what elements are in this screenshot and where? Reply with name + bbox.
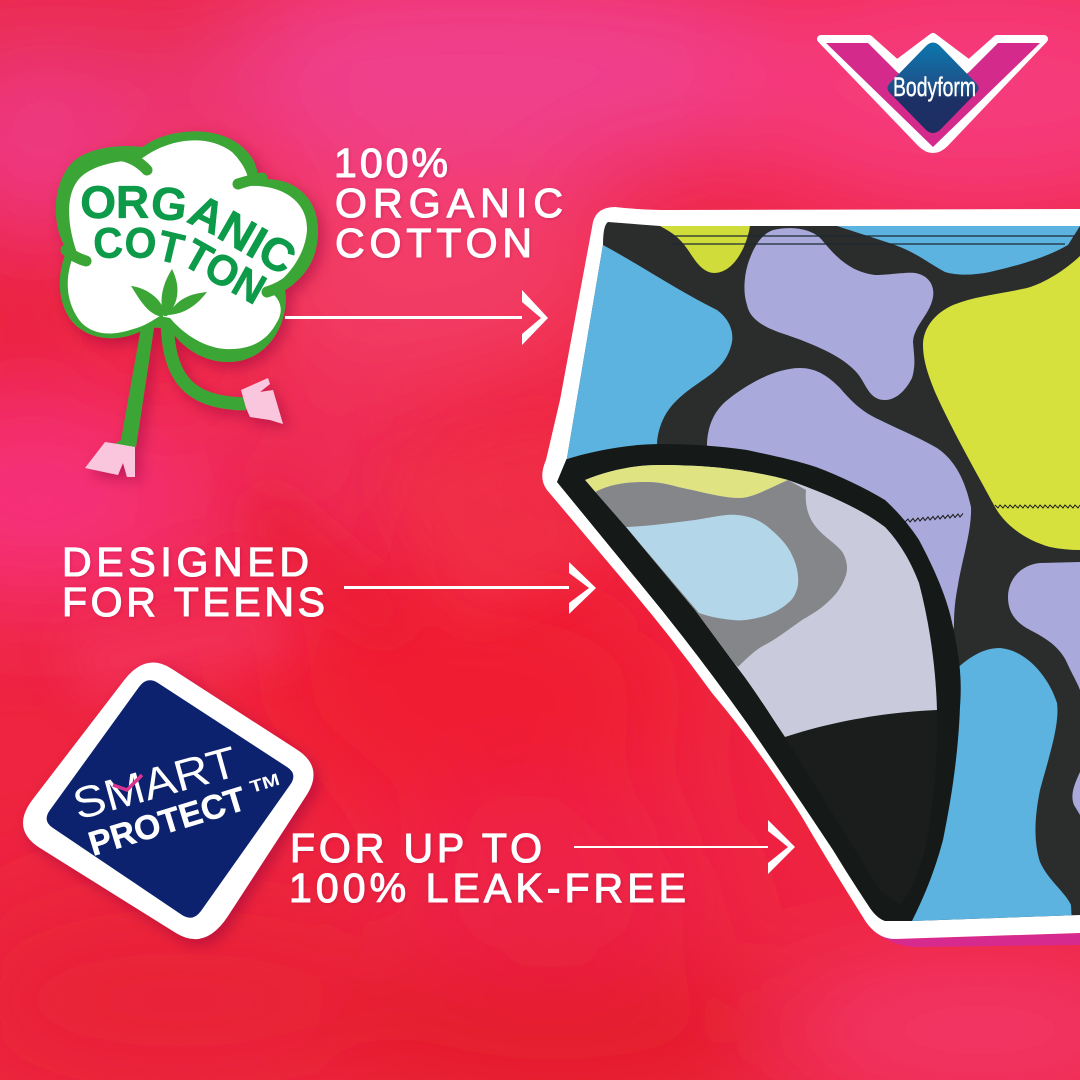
logo magenta chevron <box>826 43 1040 147</box>
stem right <box>167 318 246 404</box>
lining yellow patch <box>586 465 788 498</box>
blob: lilac right <box>1008 562 1080 690</box>
badge word: protect: PROTECT <box>84 780 250 864</box>
shoe left <box>85 442 135 477</box>
heading: 100% organic cotton: COTTON <box>335 220 532 266</box>
blob: blue left <box>560 245 732 480</box>
heading: 100% organic cotton <box>334 140 563 266</box>
heading: for up to 100% leak-free: FOR UP TO <box>290 825 542 871</box>
logo wordmark: Bodyform <box>893 72 976 102</box>
gusset black trim <box>557 444 961 921</box>
heading: for up to 100% leak-free: 100% LEAK-FREE <box>289 865 686 911</box>
panel: underwear photo with white outline <box>540 200 1080 940</box>
cotton green outline <box>56 131 318 362</box>
blob: blue bottom <box>905 648 1072 925</box>
cotton lobe tabs <box>66 155 290 292</box>
arrow: to absorbent gusset <box>574 820 795 874</box>
logo: Bodyform <box>821 37 1044 149</box>
zigzag stitching <box>905 505 1080 522</box>
gusset black mesh panel <box>785 710 937 737</box>
heading: 100% organic cotton: 100% <box>334 140 448 186</box>
blob: blue top <box>837 226 1080 275</box>
heading: designed for teens: DESIGNED <box>62 539 309 585</box>
lining blue patch <box>626 515 798 620</box>
fabric print <box>540 200 1080 940</box>
heading: for up to 100% leak-free <box>289 825 686 911</box>
badge text: cotton: COTTON <box>94 227 268 304</box>
icon: smart protect badge <box>23 663 314 939</box>
lining grey band <box>595 480 847 667</box>
blob: yellow right <box>923 256 1080 550</box>
blob: lilac middle <box>744 228 933 400</box>
blob: yellow top <box>660 226 750 273</box>
icon: organic cotton badge <box>54 131 329 486</box>
badge word: smart: SMART <box>68 738 243 830</box>
waistband stitching <box>670 236 1075 244</box>
logo blue diamond <box>888 42 978 133</box>
panty pink shadow band <box>866 922 1080 947</box>
heading: 100% organic cotton: ORGANIC <box>335 180 563 226</box>
cotton leaves <box>131 269 207 317</box>
heading: designed for teens <box>62 539 325 625</box>
blob: lilac edge <box>1072 772 1080 815</box>
arrow: to waistband <box>285 290 548 345</box>
arrow: to leg trim <box>344 562 596 614</box>
badge accent: pink m <box>113 775 142 790</box>
logo white border <box>821 37 1044 149</box>
badge text: organic: ORGANIC <box>82 186 295 272</box>
cotton white fill <box>68 140 307 349</box>
badge trademark: TM <box>248 770 282 797</box>
gusset lining <box>585 465 937 737</box>
stem left <box>113 328 154 447</box>
blob: lilac lower <box>707 368 972 630</box>
badge white border <box>23 663 314 939</box>
heading: designed for teens: FOR TEENS <box>62 579 325 625</box>
badge navy panel <box>47 680 293 918</box>
white sticker outline <box>542 207 1080 939</box>
shoe right <box>241 378 283 424</box>
